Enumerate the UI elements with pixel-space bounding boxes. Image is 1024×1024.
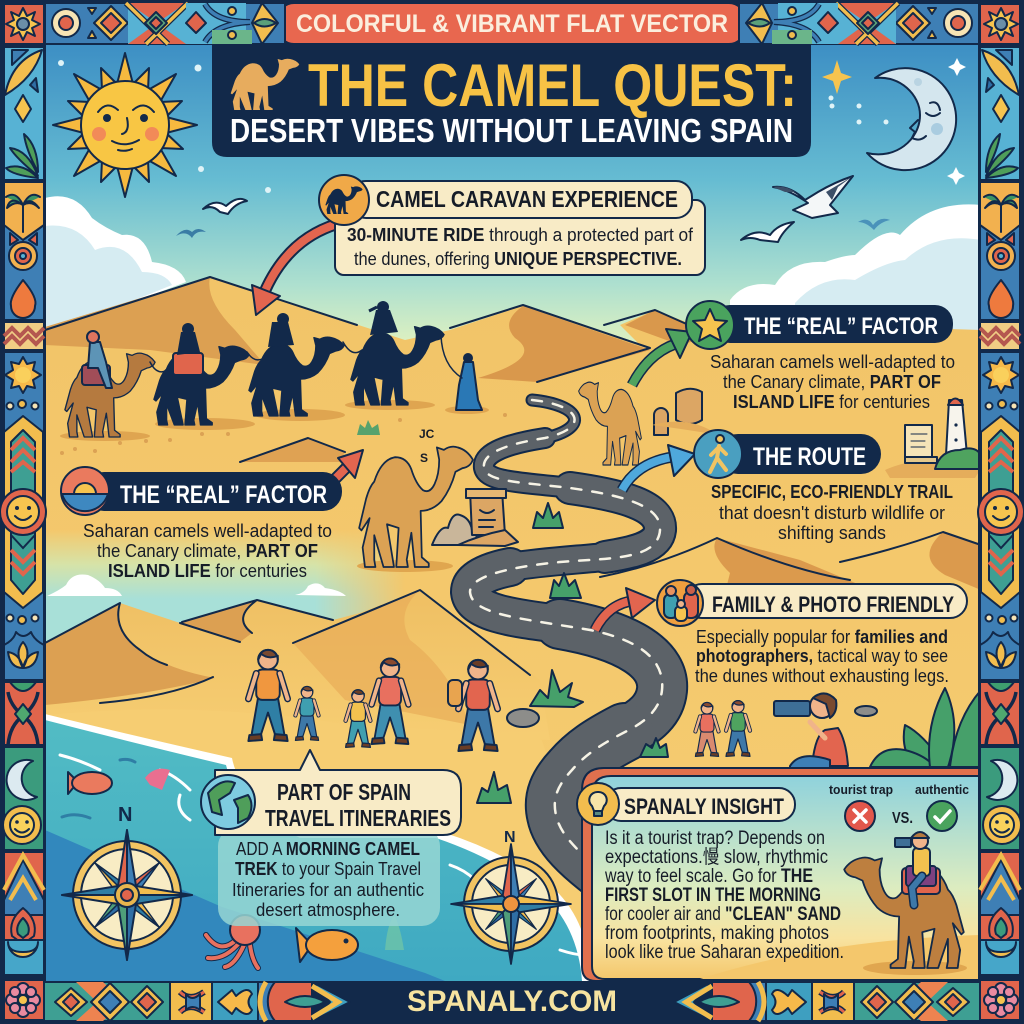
title block [212, 45, 811, 157]
footprints [60, 413, 507, 455]
border left [0, 2, 46, 1022]
compass left: N [118, 804, 132, 826]
children and photographer [695, 693, 848, 768]
callout: real factor right: Saharan camels well-adapted to [710, 352, 955, 372]
callout: family and photo: Especially popular for families and [696, 627, 948, 647]
callout: family and photo [657, 580, 967, 686]
sun [53, 53, 197, 197]
small dune left [240, 438, 345, 462]
insight body text: for cooler air and "CLEAN" SAND [605, 904, 841, 925]
middle camel [357, 447, 473, 572]
right camel and well [579, 382, 718, 465]
callout: real factor left: Saharan camels well-adapted to [83, 521, 332, 541]
arrow: route [622, 445, 695, 490]
stars [58, 58, 966, 193]
callout: part of spain: ADD A MORNING CAMEL [236, 839, 420, 859]
border bottom right [674, 982, 980, 1021]
cloud small left [47, 574, 122, 596]
callout: route: SPECIFIC, ECO-FRIENDLY TRAIL [711, 482, 953, 502]
camel 3 with rider [249, 313, 344, 416]
callout: real factor left [61, 467, 342, 581]
comparison: VS. [892, 810, 913, 827]
title camel [231, 59, 299, 110]
insight title: SPANALY INSIGHT [624, 794, 784, 819]
comparison: tourist trap [829, 782, 893, 797]
callout: part of spain: TREK to your Spain Travel [235, 859, 421, 879]
callout: real factor left: ISLAND LIFE for centuries [108, 561, 307, 581]
callout: route: shifting sands [778, 523, 886, 543]
comparison [829, 782, 969, 831]
cloud left [45, 196, 186, 330]
border top left [45, 3, 285, 44]
callout: family and photo: FAMILY & PHOTO FRIENDLY [712, 592, 954, 617]
map scribbles [419, 427, 435, 465]
map scribbles: JC [419, 427, 435, 441]
arrow: real factor left [332, 450, 363, 482]
birds [176, 176, 890, 242]
border bottom left [44, 982, 350, 1021]
camel 2 with rider [154, 323, 249, 425]
callout: part of spain: Itineraries for an authentic [232, 880, 424, 900]
callout: real factor right [686, 301, 955, 412]
insight sand [700, 935, 979, 979]
moon [867, 68, 956, 170]
fish left [68, 772, 112, 794]
callout: route: that doesn't disturb wildlife or [719, 503, 945, 523]
insight body text: FIRST SLOT IN THE MORNING [605, 885, 821, 906]
pink coral [145, 769, 170, 790]
insight body text: way to feel scale. Go for THE [604, 866, 813, 887]
lead ropes [150, 335, 462, 378]
title block: DESERT VIBES WITHOUT LEAVING SPAIN [230, 112, 793, 149]
callout: camel caravan [319, 175, 705, 275]
octopus [206, 915, 260, 968]
scroll and lighthouse [885, 398, 981, 478]
callout: real factor right: THE “REAL” FACTOR [744, 313, 938, 340]
callout: family and photo: the dunes without exhausting legs. [695, 666, 949, 686]
camel 1 with rider [65, 331, 155, 437]
seagrass [385, 915, 404, 950]
fish orange [296, 928, 358, 962]
insight title [577, 783, 795, 825]
arrow: caravan [252, 224, 337, 315]
footer wordmark: SPANALY.COM [407, 985, 617, 1018]
callout: real factor left: THE “REAL” FACTOR [120, 481, 327, 509]
top pill: COLORFUL & VIBRANT FLAT VECTOR [296, 10, 728, 38]
border top right [739, 3, 979, 44]
compass left [62, 804, 192, 960]
plant bottom right [870, 688, 981, 767]
caravan camels [60, 301, 507, 455]
insight body text [604, 828, 844, 963]
guide [456, 353, 482, 410]
callout: family and photo: photographers, tactical way to see [696, 646, 948, 666]
callout: part of spain: TRAVEL ITINERARIES [265, 805, 451, 831]
insight body text: expectations.慢 slow, rhythmic [605, 846, 828, 868]
callout: real factor right: the Canary climate, PART OF [723, 372, 941, 392]
family group [248, 650, 498, 751]
sandstone rock with face [432, 489, 518, 546]
panel: spanaly insight [577, 768, 981, 981]
callout: route: THE ROUTE [753, 443, 866, 471]
insight camel and rider [844, 832, 967, 975]
sand lower [45, 709, 590, 981]
camel 4 with rider [351, 301, 444, 405]
insight body text: from footprints, making photos [605, 923, 829, 944]
callout: part of spain: PART OF SPAIN [277, 779, 411, 805]
title block: THE CAMEL QUEST: [308, 52, 797, 119]
sea [45, 714, 590, 981]
map scribbles: S [420, 451, 428, 465]
callout: camel caravan: the dunes, offering UNIQUE PERSPECTIVE. [354, 249, 682, 269]
compass right [451, 829, 571, 964]
arrow: real factor right [632, 329, 692, 385]
border right [978, 2, 1024, 1022]
compass right: N [504, 829, 516, 846]
callout: real factor right: ISLAND LIFE for centuries [733, 392, 930, 412]
camel shadows [60, 400, 489, 441]
middle right dunes [600, 532, 981, 590]
sand base [45, 277, 981, 981]
pale horizon band [45, 530, 405, 645]
road [470, 400, 662, 880]
dune shading back [45, 277, 715, 382]
callout: real factor left: the Canary climate, PART OF [97, 541, 318, 561]
shrub center [357, 420, 380, 435]
shrubs [477, 503, 877, 803]
sky [45, 45, 981, 345]
arrow: family [595, 588, 655, 630]
comparison: authentic [915, 782, 969, 797]
callout: route [694, 430, 953, 543]
top pill [278, 3, 745, 44]
cloud right [730, 204, 981, 330]
callout: part of spain [201, 750, 461, 926]
sea creatures [68, 769, 404, 968]
insight body text: Is it a tourist trap? Depends on [605, 828, 825, 849]
cloud small right [295, 583, 346, 596]
callout: camel caravan: CAMEL CARAVAN EXPERIENCE [376, 186, 678, 212]
callout: part of spain: desert atmosphere. [256, 900, 400, 920]
insight body text: look like true Saharan expedition. [605, 942, 844, 963]
callout: camel caravan: 30-MINUTE RIDE through a protected part of [347, 225, 694, 245]
foreground dunes [45, 590, 550, 740]
